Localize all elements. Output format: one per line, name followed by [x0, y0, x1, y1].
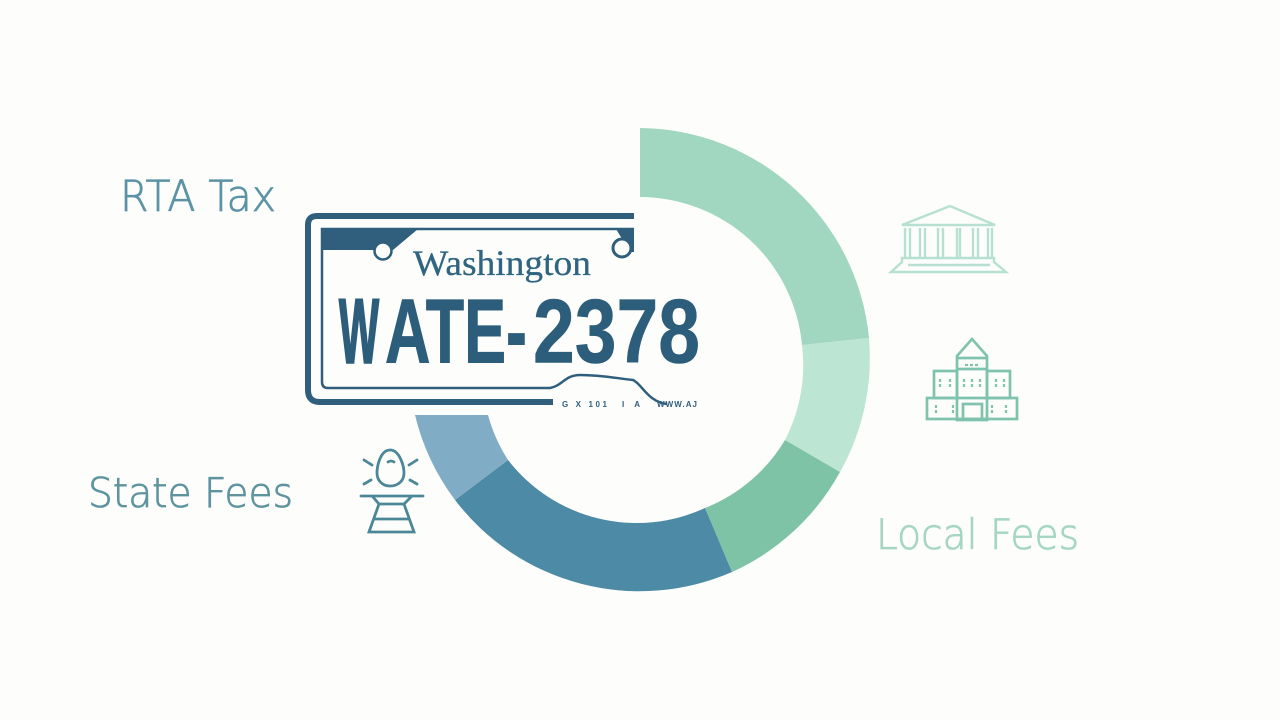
plate top-right band [616, 229, 634, 252]
segment: blue [455, 460, 732, 591]
plate fine print: I A [622, 400, 640, 409]
plate mask [300, 205, 640, 415]
state name: Washington [413, 243, 591, 283]
icon: government building [927, 339, 1017, 420]
donut chart [415, 128, 870, 591]
plate number [339, 282, 700, 382]
plate fine print: WWW.AJ [657, 400, 697, 409]
plate fine print: G X 101 [562, 400, 608, 409]
plate number: ATE- [385, 282, 527, 382]
plate number: W [339, 282, 379, 382]
plate outer frame [308, 216, 634, 402]
license plate [300, 205, 700, 415]
segment: mid green [705, 440, 840, 572]
segment: light green [640, 128, 869, 345]
right bolt hole [613, 239, 631, 257]
left bolt hole [374, 242, 392, 260]
label: State Fees: State Fees [88, 469, 293, 517]
plate fine print [562, 400, 697, 409]
plate inner frame [322, 229, 667, 404]
icon: courthouse [891, 206, 1006, 272]
icon: egg on pedestal [361, 450, 423, 532]
label: RTA Tax: RTA Tax [120, 172, 276, 222]
segment: pale green [785, 338, 870, 472]
plate top-left band [322, 229, 418, 250]
label: Local Fees: Local Fees [876, 510, 1079, 559]
segment: light blue [415, 415, 508, 500]
plate number: 2378 [533, 282, 700, 382]
